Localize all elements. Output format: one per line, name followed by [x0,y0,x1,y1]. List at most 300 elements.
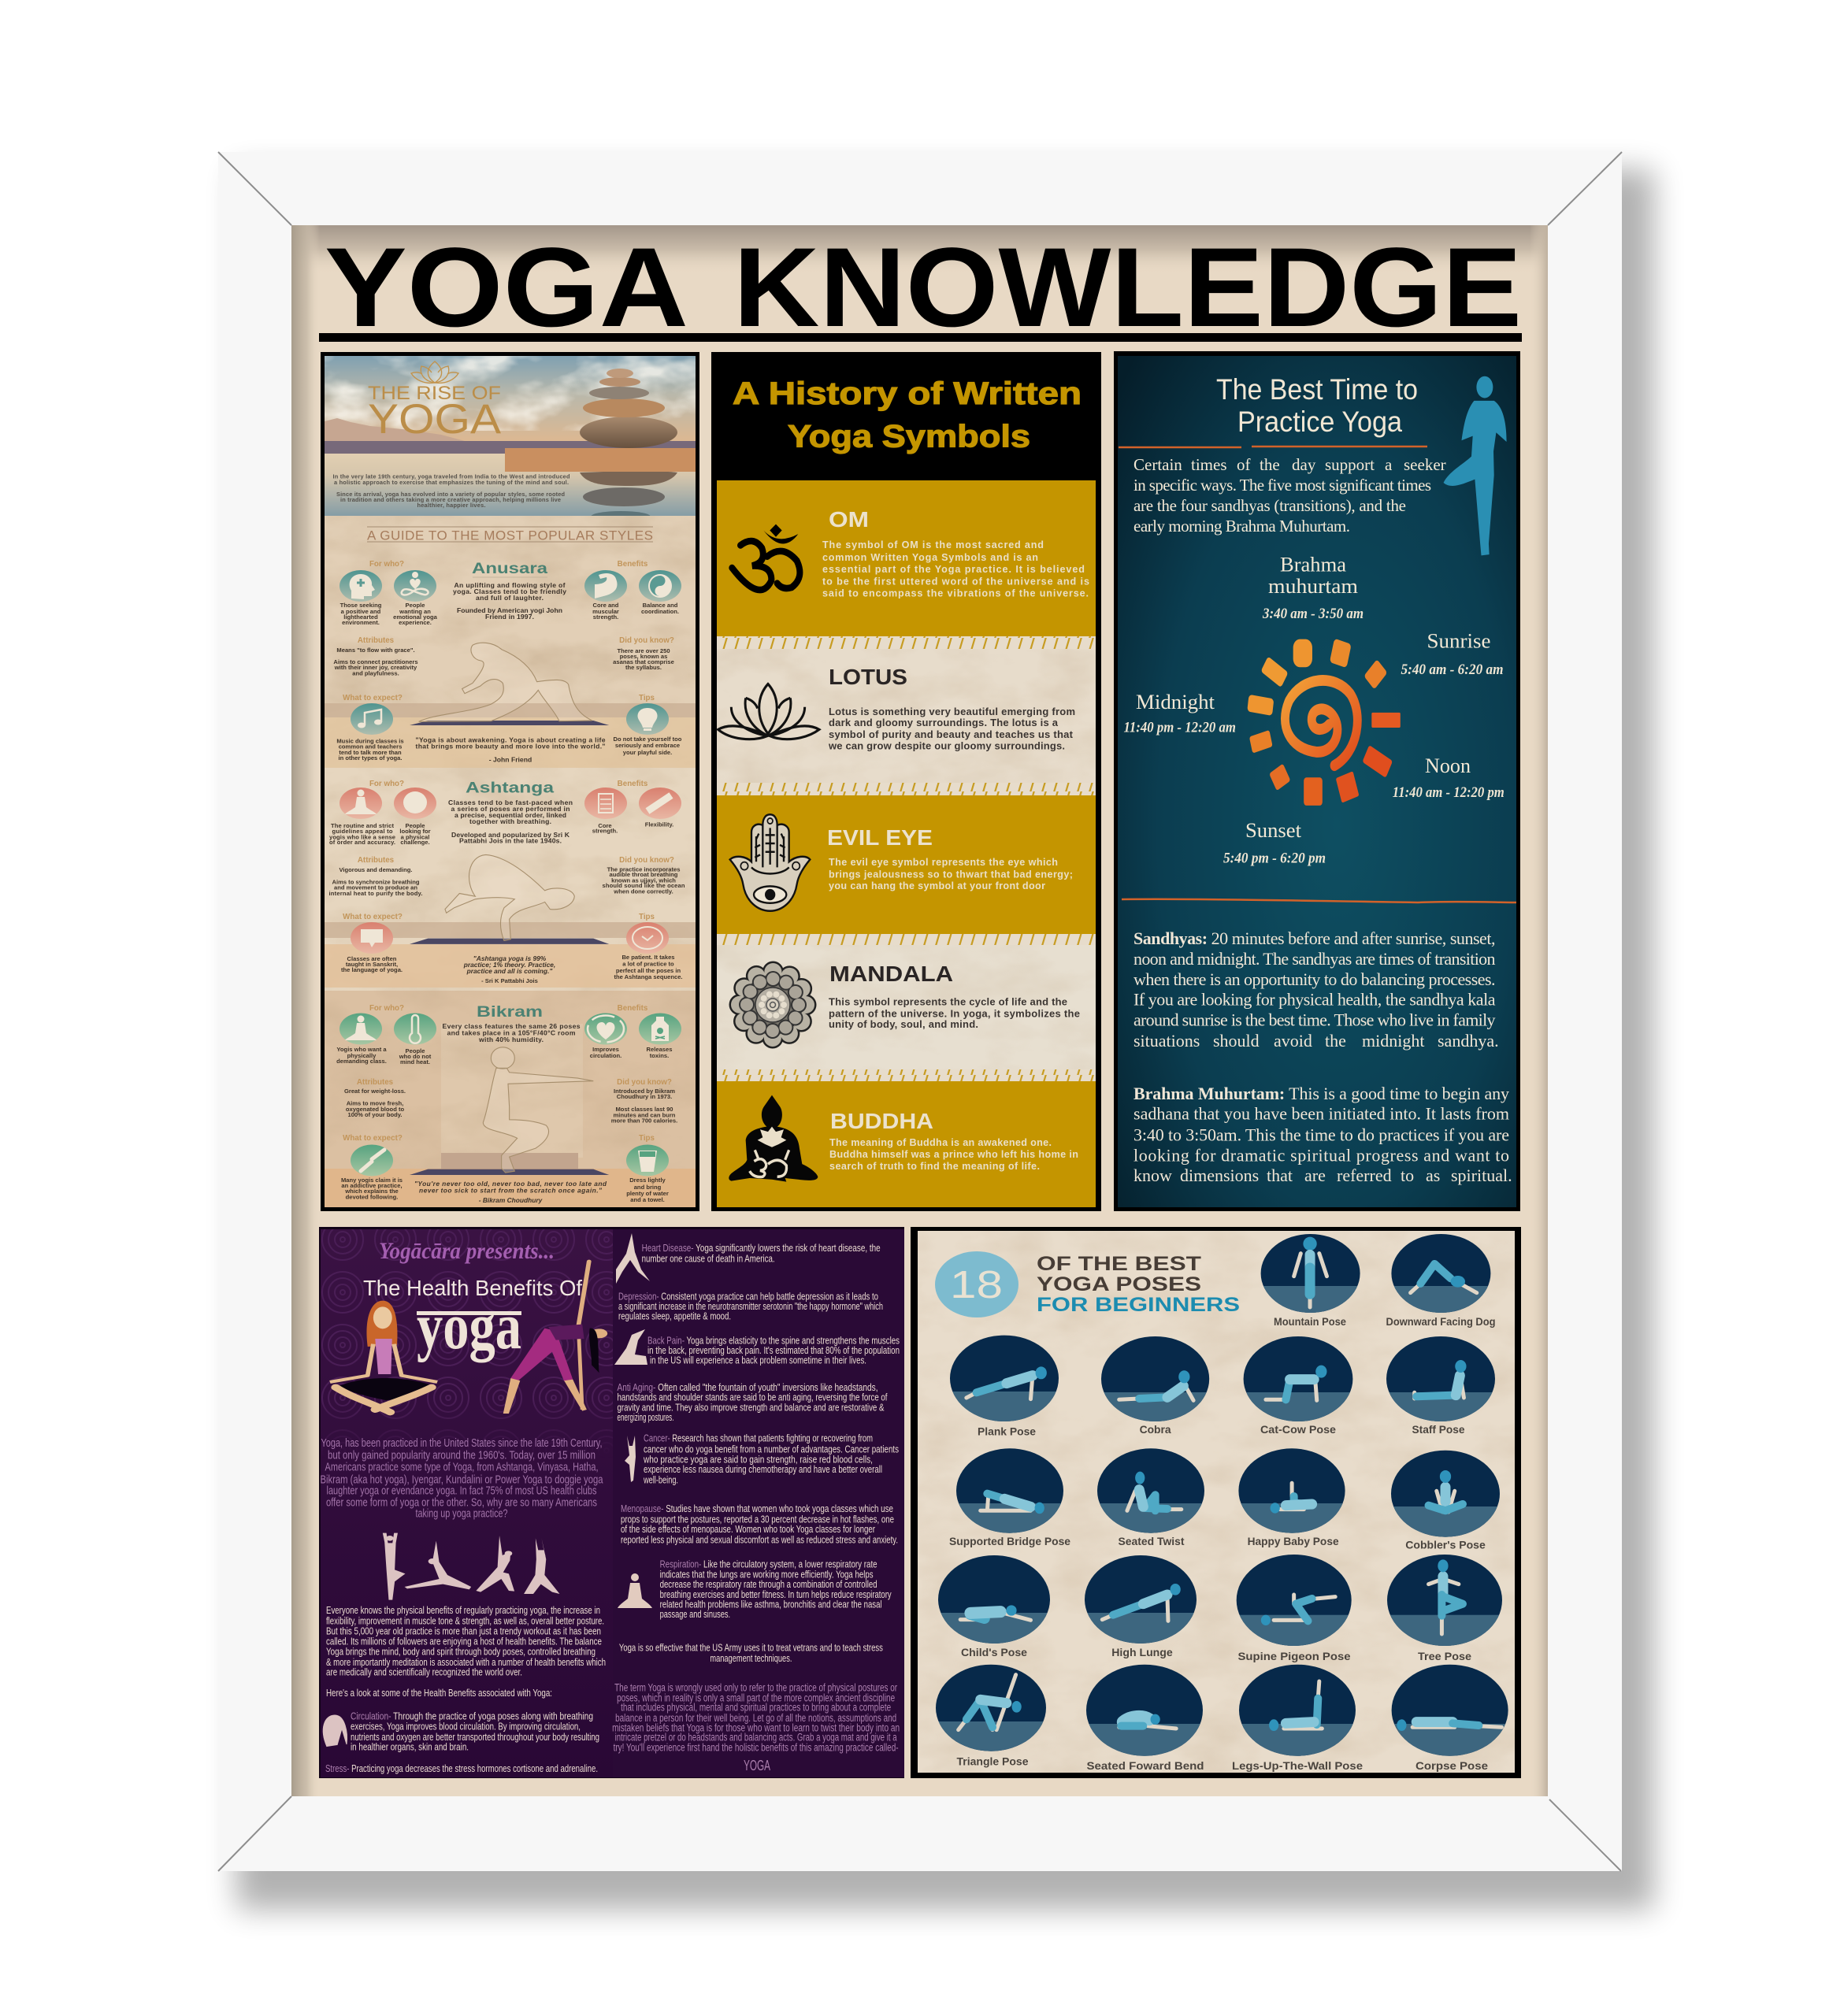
intro paragraph: day [1292,455,1316,474]
captions: anusara for who and benefits: a positive and [341,608,381,615]
label: sunset [1223,819,1326,867]
paragraph: brahma muhurtam: to [1401,1166,1414,1185]
section: ashtanga: Attributes [358,856,395,865]
paragraph: sandhyas: the [1325,1031,1346,1051]
captions: anusara for who and benefits: Core and [593,602,619,609]
pose labels: High Lunge [1111,1646,1173,1658]
paragraph: sandhyas: If you are looking for physical health, the sandhya kala [1133,990,1496,1010]
attributes text: bikram [344,1088,677,1125]
icon: evil eye hamsa [730,814,810,911]
section: ashtanga: Tips [639,913,655,921]
captions: ashtanga for who and benefits: yogis who like a sense [329,833,395,841]
pose labels: Cat-Cow Pose [1260,1423,1336,1436]
pose labels: Tree Pose [1418,1650,1471,1662]
section: bikram: For who? [369,1004,404,1013]
captions: ashtanga bottom: practice and all is coming." [466,967,553,975]
text: om: The symbol of OM is the most sacred and [822,539,1044,550]
intro paragraph: Americans practice some type of Yoga, from Ashtanga, Vinyasa, Hatha, [325,1461,599,1473]
body: ashtanga: a series of poses are performed in [451,805,570,813]
paragraph: brahma muhurtam: that [1267,1166,1293,1185]
pose labels: Happy Baby Pose [1248,1535,1339,1547]
item: menopause: reported less physical and sexual discomfort as well as reduced stress and anxiety. [621,1533,898,1545]
pose labels: Seated Foward Bend [1087,1759,1204,1772]
label: midnight [1123,691,1236,736]
section: bikram [325,991,696,1207]
item: circulation [323,1710,599,1753]
captions: bikram for who and benefits: physically [347,1052,377,1059]
captions: bikram bottom: and bring [634,1184,662,1191]
attributes text: ashtanga: and movement to produce an [334,884,417,891]
captions: anusara for who and benefits: experience. [399,619,432,626]
captions: ashtanga for who and benefits: looking for [399,828,431,835]
icon: buddha [729,1095,818,1182]
captions: anusara bottom: Music during classes is [336,737,404,745]
paragraph: brahma muhurtam: as [1426,1166,1440,1185]
panel: health benefits of yoga [319,1227,904,1778]
attributes text: bikram: Great for weight-loss. [344,1088,406,1095]
label: sunrise: 5:40 am - 6:20 am [1401,662,1503,678]
item: respiration: Respiration- Like the circulatory system, a lower respiratory rate [660,1558,877,1570]
badge: 18: 18 [950,1264,1003,1306]
captions: bikram bottom: devoted following. [346,1194,398,1200]
captions: ashtanga for who and benefits: challenge. [400,839,430,846]
intro paragraph: of [1237,455,1251,474]
text: om: to be the first uttered word of the universe and is [822,576,1089,587]
label: noon [1393,754,1505,801]
captions: anusara bottom: seriously and embrace [615,742,680,749]
attributes text: anusara: with their inner joy, creativity [334,664,417,671]
note: us army: management techniques. [710,1652,792,1664]
paragraph: sandhyas: situations [1133,1031,1200,1051]
label: sunset: Sunset [1245,819,1302,842]
section: bikram: Attributes [357,1078,394,1087]
captions: anusara for who and benefits: wanting an [399,608,431,615]
captions: bikram for who and benefits: Improves [592,1046,619,1053]
heading: history of symbols: A History of Written [733,376,1082,411]
captions: bikram for who and benefits: mind heat. [400,1058,430,1065]
white picture frame [218,152,1622,1871]
paragraph: everyone knows: Here's a look at some of the Health Benefits associated with Yoga: [326,1687,552,1699]
paragraph: sandhyas: noon and midnight. The sandhyas are times of transition [1133,949,1495,969]
section: ashtanga: Did you know? [619,856,674,865]
title: KNOWLEDGE [733,225,1522,350]
section: bikram: Did you know? [617,1078,672,1087]
paragraph: sandhyas: avoid [1274,1031,1312,1051]
heading: the rise of yoga: THE RISE OF [368,383,501,404]
text: om: essential part of the Yoga practice. It is believed [822,564,1085,575]
item: respiration: indicates that the lungs are working more efficiently. Yoga helps [660,1568,874,1580]
paragraph: everyone knows: flexibility, improvement in muscle tone & strength, as well as, overall better posture. [326,1614,604,1626]
item: anti aging: energizing postures. [618,1411,674,1423]
paragraph: brahma muhurtam: referred [1337,1166,1392,1185]
panel: the rise of yoga [321,352,699,1211]
section: bikram: Bikram [477,1004,543,1021]
figure: tree pose silhouette [1444,376,1507,555]
intro paragraph: early morning Brahma Muhurtam. [1133,517,1350,536]
attributes text: ashtanga: internal heat to purify the body. [329,890,422,897]
body: bikram: with 40% humidity. [478,1036,544,1043]
captions: bikram bottom [341,1177,669,1204]
text: evil eye: EVIL EYE [827,825,933,850]
heading: history of symbols [733,376,1082,454]
intro paragraph: in specific ways. The five most significant times [1133,476,1431,495]
label: noon: Noon [1425,754,1471,777]
section: anusara [325,516,696,768]
captions: ashtanga bottom: the Ashtanga sequence. [614,973,683,980]
pose labels: Seated Twist [1119,1535,1185,1547]
captions: ashtanga for who and benefits: a physical [401,833,429,841]
heading: best time [1216,373,1418,438]
captions: bikram for who and benefits: toxins. [650,1052,669,1059]
label: midnight: Midnight [1136,691,1215,713]
item: depression [618,1291,883,1322]
item: anti aging: Anti Aging- Often called "the fountain of youth" inversions like headstands, [618,1381,877,1393]
paragraph: brahma muhurtam: 3:40 to 3:50am. This the time to do practices if you are [1133,1125,1509,1144]
item: back pain [614,1329,900,1366]
pose labels: Supported Bridge Pose [949,1535,1070,1547]
captions: ashtanga for who and benefits: Flexibility. [645,821,673,828]
heading: of the best yoga poses [1037,1253,1240,1316]
text: evil eye [827,825,1073,891]
text: evil eye: you can hang the symbol at your front door [829,880,1045,891]
item: heart disease: Heart Disease- Yoga significantly lowers the risk of heart disease, the [642,1242,881,1254]
text: buddha: BUDDHA [830,1109,933,1133]
captions: ashtanga bottom: - Sri K Pattabhi Jois [481,977,538,984]
item: circulation: nutrients and oxygen are better transported throughout your body resulting [351,1731,599,1743]
paragraph: brahma muhurtam: Brahma Muhurtam: This is a good time to begin any [1133,1084,1509,1103]
body: ashtanga: together with breathing. [469,817,551,825]
item: respiration [618,1558,892,1620]
heading: yogacara presents: Yogācāra presents... [379,1238,555,1264]
icons: bikram bottom [351,1145,669,1177]
paragraph: everyone knows: called. Its millions of followers are enjoying a host of health benefits. The balance [326,1635,602,1647]
label: sunset: 5:40 pm - 6:20 pm [1223,850,1326,867]
intro paragraph [320,1437,603,1521]
intro paragraph: support [1325,455,1375,474]
paragraph: sandhyas: midnight [1362,1031,1424,1051]
label: brahma muhurtam: 3:40 am - 3:50 am [1262,606,1364,622]
item: respiration: breathing exercises and better fitness. In turn helps reduce respiratory [660,1588,892,1600]
captions: ashtanga bottom: the language of yoga. [341,966,403,973]
label: sunrise: Sunrise [1427,630,1490,652]
paragraph: the term yoga: poses, which in reality is only a small part of the more complex ancient discipline [617,1692,895,1704]
captions: bikram bottom: never too sick to start from the scratch once again." [419,1186,603,1194]
captions: bikram bottom: plenty of water [626,1190,669,1197]
pose labels: Cobra [1140,1423,1171,1436]
text: om: said to encompass the vibrations of the universe. [822,587,1089,598]
item: menopause: Menopause- Studies have shown that women who took yoga classes which use [621,1503,893,1514]
paragraph: brahma muhurtam: looking for dramatic spiritual progress and want to [1133,1145,1509,1165]
body: ashtanga: a precise, sequential order, linked [455,811,566,819]
panel: best time to practice [1114,351,1520,1211]
figure: triangle pose woman [503,1262,607,1414]
body: bikram [443,1022,581,1043]
captions: ashtanga bottom [341,954,683,984]
attributes text: bikram: more than 700 calories. [611,1117,677,1125]
section: ashtanga [325,768,696,991]
captions: anusara bottom: in other types of yoga. [338,754,403,762]
captions: ashtanga for who and benefits: Core [598,822,612,829]
item: circulation: exercises, Yoga improves blood circulation. By improving circulation, [351,1721,581,1732]
captions: anusara bottom [336,736,682,764]
captions: anusara for who and benefits: coordination. [641,608,679,615]
section: bikram: What to expect? [343,1134,403,1143]
section: anusara: For who? [369,560,404,569]
attributes text: anusara: Aims to connect practitioners [333,658,418,665]
paragraph: the term yoga: that includes physical, mental and spiritual practices to bring about a complete [621,1702,891,1714]
item: respiration: related health problems like asthma, bronchitis and clear the nasal [660,1599,882,1610]
paragraph: brahma muhurtam: know [1133,1166,1172,1185]
figure: ashtanga crow pose [410,854,609,944]
attributes text: bikram: Aims to move fresh, [347,1099,403,1107]
item: anti aging: handstands and shoulder stands are said to be anti aging, reversing the force of [618,1392,888,1403]
section: ashtanga: What to expect? [343,913,403,921]
body: ashtanga [448,799,573,844]
label: midnight: 11:40 pm - 12:20 am [1123,720,1236,736]
intro text [332,472,570,509]
item: menopause [621,1503,898,1545]
captions: anusara bottom: - John Friend [489,756,532,764]
captions: bikram bottom: which explains the [344,1188,399,1195]
paragraph: brahma muhurtam [1133,1084,1512,1185]
subheading: guide: A GUIDE TO THE MOST POPULAR STYLES [367,528,653,543]
intro text: healthier, happier lives. [417,502,485,509]
text: buddha: search of truth to find the meaning of life. [829,1161,1040,1172]
paragraph: everyone knows: & more importantly meditation is associated with a number of health benefits which [326,1656,606,1668]
section: ashtanga: Benefits [618,780,648,788]
icon: sun spiral [1247,639,1401,806]
captions: anusara for who and benefits [340,602,679,626]
text: buddha: The meaning of Buddha is an awakened one. [829,1137,1052,1148]
attributes text: bikram: oxygenated blood to [346,1106,404,1113]
captions: bikram bottom: Many yogis claim it is [341,1177,403,1184]
heading: the health benefits of: The Health Benefits Of [363,1276,582,1300]
intro paragraph: seeker [1404,455,1446,474]
paragraph: the term yoga: try! You'll experience first hand the holistic benefits of this amazing practice called- [614,1741,899,1753]
attributes text: anusara: asanas that comprise [613,658,674,665]
intro paragraph: but only gained popularity around the 1960's. Today, over 15 million [328,1450,595,1462]
captions: ashtanga bottom: Be patient. It takes [621,954,675,961]
label: brahma muhurtam: Brahma [1280,554,1346,576]
paragraph: sandhyas: sandhya. [1438,1031,1499,1051]
paragraph: everyone knows: Yoga brings the mind, body and spirit through body poses, controlled breathing [326,1646,595,1658]
captions: anusara for who and benefits: Balance and [643,602,678,609]
captions: anusara for who and benefits: strength. [593,613,618,621]
pose labels [949,1315,1495,1772]
paragraph: the term yoga: balance in a person for their well being. Let go of all the notions, assumptions and [615,1712,896,1724]
intro paragraph: a [1385,455,1393,474]
pose figures: rows four and five [959,1559,1501,1731]
note: us army: Yoga is so effective that the US Army uses it to treat vetrans and to teach stress [619,1642,883,1654]
pose labels: Staff Pose [1412,1423,1465,1436]
pose labels: Mountain Pose [1274,1315,1346,1328]
paragraph: the term yoga: YOGA [744,1758,770,1773]
attributes text: ashtanga: The practice incorporates [607,866,680,873]
intro text: in tradition and others taking a more creative approach, helping millions live [340,496,561,503]
section: anusara: What to expect? [343,694,403,702]
captions: ashtanga for who and benefits: The routine and strict [331,822,394,829]
pose labels: Cobbler's Pose [1405,1539,1486,1551]
captions: bikram for who and benefits [336,1046,672,1065]
paragraph: brahma muhurtam: sadhana that you have been initiated into. It lasts from [1133,1104,1509,1124]
paragraph: sandhyas: should [1213,1031,1260,1051]
paragraph: everyone knows [326,1604,606,1699]
body: ashtanga: Classes tend to be fast-paced when [448,799,573,806]
captions: anusara for who and benefits: environment. [342,619,380,626]
text: mandala [829,962,1080,1030]
captions: bikram bottom: and a towel. [630,1196,665,1203]
item: respiration: decrease the respiratory rate through a combination of controlled [660,1578,877,1590]
text: om: OM [829,507,869,532]
captions: anusara for who and benefits: muscular [592,608,619,615]
paragraph: brahma muhurtam: spiritual. [1451,1166,1512,1185]
paragraph: brahma muhurtam: are [1304,1166,1326,1185]
text: mandala: MANDALA [829,962,953,986]
label: noon: 11:40 am - 12:20 pm [1393,784,1505,801]
attributes text: anusara: poses, known as [620,653,667,660]
item: heart disease [616,1233,881,1284]
text: lotus: LOTUS [829,665,907,689]
item: circulation: Circulation- Through the practice of yoga poses along with breathing [351,1710,593,1721]
text: om [822,507,1089,598]
label: sunrise [1401,630,1503,678]
icon: mandala [740,972,806,1038]
captions: bikram for who and benefits: Yogis who want a [336,1046,387,1053]
figure: bikram chair pose [410,1047,609,1175]
icons: ashtanga top [339,788,681,819]
intro paragraph: are the four sandhyas (transitions), and the [1133,496,1406,515]
captions: ashtanga bottom: "Ashtanga yoga is 99% [473,954,547,962]
captions: anusara for who and benefits: emotional yoga [393,613,438,621]
heading: of the best yoga poses: YOGA POSES [1037,1273,1201,1295]
item: back pain: in the back, preventing back pain. It's estimated that 80% of the population [647,1344,900,1356]
body: anusara: and full of laughter. [476,594,544,602]
pose labels: Plank Pose [978,1425,1036,1438]
attributes text: bikram: Most classes last 90 [615,1106,673,1113]
paragraph: sandhyas: around sunrise is the best time. Those who live in family [1133,1010,1495,1030]
heading: the rise of yoga: YOGA [368,396,502,443]
text: lotus [828,665,1075,751]
text: evil eye: brings jealousness so to thwart that bad energy; [829,869,1073,880]
intro paragraph: laughter yoga or evendance yoga. In fact 75% of most US health clubs [326,1485,597,1498]
intro paragraph: taking up yoga practice? [416,1508,507,1521]
pose labels: Corpse Pose [1415,1759,1488,1772]
section: bikram: Tips [639,1134,655,1143]
figure: seated woman [330,1301,437,1412]
captions: ashtanga for who and benefits: of order and accuracy. [329,839,395,846]
band backgrounds [717,480,1096,1207]
intro text: a holistic approach to exercise that emphasizes the tuning of the mind and soul. [334,479,569,486]
captions: bikram bottom: Dress lightly [629,1177,666,1184]
attributes text: anusara: Means "to flow with grace". [336,647,415,654]
section: anusara: Anusara [472,561,548,577]
captions: anusara bottom: tend to talk more than [339,749,402,756]
note: us army [619,1642,883,1664]
item: cancer: well-being. [643,1473,678,1485]
section: bikram: Benefits [618,1004,648,1013]
heading: best time: Practice Yoga [1237,406,1402,438]
heading: of the best yoga poses: FOR BEGINNERS [1037,1294,1240,1316]
attributes text: ashtanga: Aims to synchronize breathing [332,879,420,885]
item: back pain: Back Pain- Yoga brings elasticity to the spine and strengthens the muscles [647,1335,900,1347]
body: ashtanga: Pattabhi Jois in the late 1940s. [459,836,562,844]
captions: ashtanga for who and benefits: guidelines appeal to [332,828,393,835]
paragraph: the term yoga: The term Yoga is wrongly used only to refer to the practice of physical postures or [614,1681,897,1693]
body: bikram: Every class features the same 26 poses [443,1022,581,1030]
heading: of the best yoga poses: OF THE BEST [1037,1253,1201,1275]
captions: bikram for who and benefits: People [406,1047,425,1054]
paragraph: everyone knows: But this 5,000 year old practice is more than just a trendy workout as it has been [326,1625,601,1637]
paragraph: the term yoga: mistaken beliefs that Yoga is for those who want to learn to twist their body into an [612,1721,900,1733]
attributes text: anusara: the syllabus. [625,664,662,671]
item: depression: Depression- Consistent yoga practice can help battle depression as it leads to [618,1291,878,1303]
captions: ashtanga bottom: practice; 1% theory. Practice, [463,961,555,969]
item: cancer: experience less nausea during chemotherapy and have a better overall [644,1463,882,1475]
intro paragraph: Yoga, has been practiced in the United States since the late 19th Century, [321,1437,602,1450]
panel: yoga symbols [711,352,1101,1211]
pose labels: Child's Pose [961,1646,1027,1658]
intro text: Since its arrival, yoga has evolved into a variety of popular styles, some rooted [336,491,565,498]
heading: history of symbols: Yoga Symbols [788,419,1030,454]
captions: anusara for who and benefits: lighthearted [343,613,378,621]
item: menopause: of the side effects of menopause. Women who took Yoga classes for longer [621,1523,875,1535]
captions: anusara for who and benefits: Those seeking [340,602,382,609]
item: depression: regulates sleep, appetite & mood. [618,1310,731,1322]
captions: bikram for who and benefits: who do not [399,1053,432,1060]
pose labels: Legs-Up-The-Wall Pose [1232,1759,1363,1772]
captions: anusara bottom: your playful side. [623,749,672,756]
item: back pain: in the US will experience a back problem sometime in their lives. [650,1354,866,1366]
text: lotus: we can grow despite our gloomy surroundings. [828,740,1065,751]
item: circulation: in healthier organs, skin and brain. [351,1741,469,1753]
paragraph: brahma muhurtam: dimensions [1180,1166,1259,1185]
title: YOGA [325,225,688,350]
attributes text: ashtanga [329,866,685,897]
text: buddha [829,1109,1078,1172]
captions: bikram for who and benefits: circulation. [590,1052,621,1059]
paragraph: the term yoga [612,1681,900,1773]
attributes text: bikram: Choudhury in 1973. [617,1093,672,1100]
text: buddha: Buddha himself was a prince who left his home in [829,1149,1078,1160]
captions: bikram bottom: an addictive practice, [341,1182,403,1189]
captions: ashtanga for who and benefits [329,821,673,846]
item: cancer: Cancer- Research has shown that patients fighting or recovering from [644,1432,873,1444]
icon: lotus [718,684,819,739]
icons: anusara top [339,570,681,602]
attributes text: ashtanga: Vigorous and demanding. [339,866,413,873]
icons: anusara bottom [351,703,669,735]
label: brahma muhurtam [1262,554,1364,622]
attributes text: ashtanga: audible throat breathing [610,871,678,878]
badge: 18 [935,1251,1018,1317]
body: anusara: yoga. Classes tend to be friendly [453,587,566,595]
intro paragraph: Certain [1133,455,1182,474]
captions: bikram for who and benefits: demanding class. [336,1058,387,1065]
pose labels: Triangle Pose [956,1755,1029,1768]
captions: ashtanga bottom: taught in Sanskrit, [346,961,398,968]
icon: om [732,524,800,590]
body: anusara: Friend in 1997. [485,613,534,621]
captions: anusara bottom: common and teachers [339,743,402,750]
item: anti aging [618,1381,888,1423]
attributes text: bikram: minutes and can burn [614,1112,676,1118]
body: anusara [453,581,566,621]
item: cancer: who practice yoga are said to gain strength, raise red blood cells, [643,1453,873,1465]
item: heart disease: number one cause of death in America. [642,1253,775,1265]
item: menopause: props to support the postures, reported a 30 percent decrease in hot flashes, one [621,1513,894,1525]
captions: anusara bottom: Do not take yourself too [614,736,682,743]
section: anusara: Benefits [618,560,648,569]
